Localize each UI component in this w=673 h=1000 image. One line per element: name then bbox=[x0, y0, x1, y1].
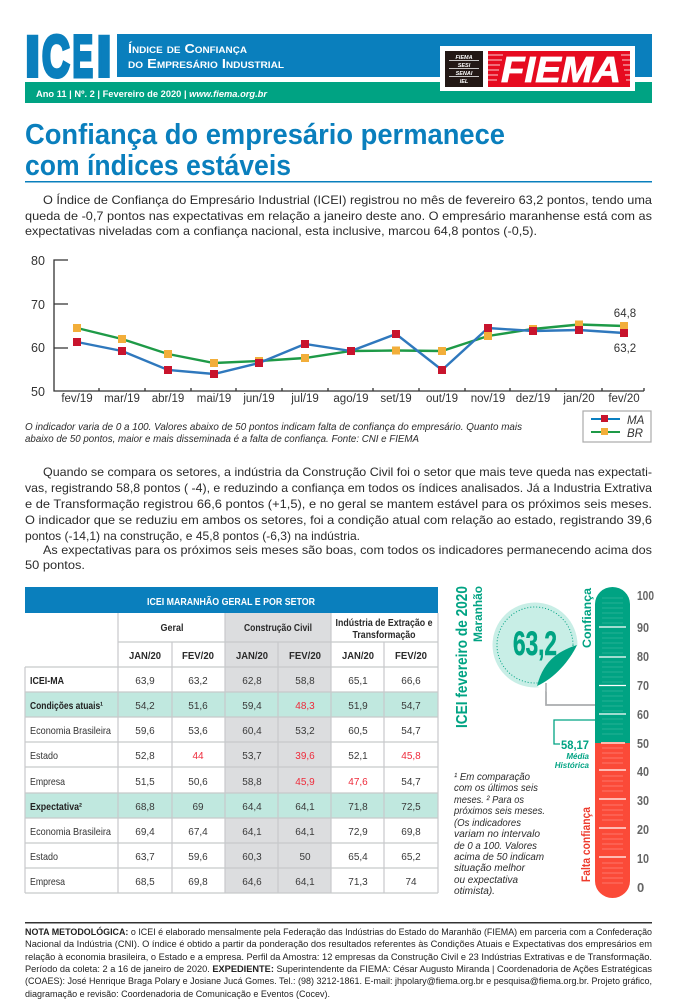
scale labels: 80 bbox=[637, 649, 649, 664]
month headers bbox=[129, 650, 427, 662]
month labels: jul/19 bbox=[290, 393, 319, 405]
row: Condições atuais: Condições atuais¹ bbox=[30, 700, 103, 712]
month labels: dez/19 bbox=[516, 393, 550, 405]
gauge footnote bbox=[453, 772, 545, 897]
row: Economia Brasileira: 60,4 bbox=[242, 726, 262, 737]
FIEMA logo: IEL bbox=[460, 79, 469, 85]
ICEI wordmark bbox=[24, 24, 112, 90]
row: Empresa: Empresa bbox=[30, 776, 65, 788]
ICEI wordmark: E bbox=[72, 24, 93, 90]
row: Empresa (expectativa): 64,6 bbox=[242, 877, 262, 888]
row: Empresa: 58,8 bbox=[242, 777, 262, 788]
ICEI wordmark: C bbox=[42, 24, 70, 90]
month labels: jan/20 bbox=[562, 393, 595, 405]
chart note bbox=[25, 421, 523, 445]
row: Economia Brasileira: 53,2 bbox=[295, 726, 315, 737]
gauge footnote: variam no intervalo bbox=[454, 829, 540, 840]
gauge footnote: ou expectativa bbox=[454, 875, 518, 886]
publication name: do Empresário Industrial bbox=[128, 56, 285, 71]
thermometer gauge bbox=[581, 587, 654, 898]
methodology footer: relação à economia brasileira, o Estado e a empresa. Perfil da Amostra: 12 empresas da Construção Civil e 23 Indústrias Extrativas e de Transformação. bbox=[25, 952, 652, 963]
vertical title: Maranhão bbox=[471, 586, 485, 642]
month headers: FEV/20 bbox=[182, 650, 214, 662]
sector analysis paragraphs: O indicador que se reduziu em ambos os setores, foi a condição atual com relação ao estado, registrando 39,6 bbox=[25, 513, 652, 527]
thermometer gauge: Falta confiança bbox=[581, 806, 593, 882]
row: Empresa (expectativa): 69,8 bbox=[188, 877, 208, 888]
row: Empresa (expectativa) bbox=[30, 876, 417, 888]
sector analysis paragraphs: vas, registrando 58,8 pontos ( -4), e reduzindo a confiança em todos os índices analisados. Já a Industria Extrativa bbox=[25, 481, 652, 495]
end value labels bbox=[614, 308, 636, 355]
minor ticks bbox=[602, 598, 623, 734]
row: Empresa (expectativa): 74 bbox=[405, 877, 417, 888]
scale labels: 100 bbox=[637, 588, 654, 603]
confidence section bbox=[595, 587, 630, 743]
scale labels: 0 bbox=[637, 880, 644, 895]
header banner bbox=[24, 24, 652, 103]
row: Expectativa: Expectativa² bbox=[30, 801, 82, 813]
month labels: nov/19 bbox=[471, 393, 505, 405]
group headers: Construção Civil bbox=[244, 622, 312, 634]
row: Estado: 44 bbox=[192, 751, 204, 762]
month labels: fev/20 bbox=[608, 393, 640, 405]
row: Expectativa: 71,8 bbox=[348, 802, 368, 813]
row: Estado (expectativa): Estado bbox=[30, 851, 58, 863]
series MA line bbox=[77, 328, 624, 374]
methodology footer bbox=[25, 922, 652, 1000]
intro paragraph: expectativas niveladas com a confiança nacional, esta inclusive, marcou 64,8 pontos (-0,5). bbox=[25, 224, 537, 238]
row: Expectativa: 72,5 bbox=[401, 802, 421, 813]
table: ICEI Maranhão bbox=[25, 587, 438, 893]
FIEMA logo: SENAI bbox=[456, 71, 473, 77]
row: Estado (expectativa): 60,3 bbox=[242, 852, 262, 863]
group headers bbox=[160, 617, 433, 641]
group headers: Geral bbox=[160, 622, 184, 634]
month headers: FEV/20 bbox=[289, 650, 321, 662]
row: Economia Brasileira: 54,7 bbox=[401, 726, 421, 737]
y axis labels: 80 bbox=[31, 254, 45, 268]
month labels bbox=[61, 393, 640, 405]
row: Economia Brasileira (expectativa): 72,9 bbox=[348, 827, 368, 838]
historical average marker: Histórica bbox=[555, 761, 590, 770]
vertical title bbox=[454, 586, 485, 728]
methodology footer: Nacional da Indústria (CNI). O índice é obtido a partir da ponderação dos resultados referentes às Condições Atuais e Expectativas dos empresários em bbox=[25, 939, 652, 950]
month headers: JAN/20 bbox=[236, 650, 268, 662]
historical average marker: 58,17 bbox=[561, 740, 589, 752]
row: Empresa: 47,6 bbox=[348, 777, 368, 788]
badge circle bbox=[492, 602, 578, 688]
row: Empresa bbox=[30, 776, 421, 788]
publication name bbox=[128, 41, 285, 71]
row: Empresa: 45,9 bbox=[295, 777, 315, 788]
sector analysis paragraphs: 50 pontos. bbox=[25, 558, 85, 572]
row: ICEI-MA: 66,6 bbox=[401, 676, 421, 687]
row: Empresa (expectativa): Empresa bbox=[30, 876, 65, 888]
row: Empresa: 50,6 bbox=[188, 777, 208, 788]
month labels: mar/19 bbox=[104, 393, 140, 405]
row: Estado: 52,8 bbox=[135, 751, 155, 762]
scale labels: 10 bbox=[637, 851, 649, 866]
row: Estado: 45,8 bbox=[401, 751, 421, 762]
row: Expectativa: 64,1 bbox=[295, 802, 315, 813]
row: Economia Brasileira (expectativa): 69,8 bbox=[401, 827, 421, 838]
month labels: mai/19 bbox=[197, 393, 231, 405]
FIEMA logo: FIEMA bbox=[455, 55, 473, 61]
row: Condições atuais: 54,7 bbox=[401, 701, 421, 712]
row: ICEI-MA: 58,8 bbox=[295, 676, 315, 687]
series MA markers bbox=[73, 324, 628, 378]
ICEI wordmark: I bbox=[96, 24, 112, 90]
FIEMA logo: SESI bbox=[458, 63, 471, 69]
table grid bbox=[25, 613, 438, 893]
month labels: set/19 bbox=[380, 393, 412, 405]
sector analysis paragraphs bbox=[25, 465, 652, 572]
row: Estado bbox=[30, 750, 421, 762]
main headline bbox=[25, 119, 505, 182]
end value labels: 63,2 bbox=[614, 343, 636, 355]
sector analysis paragraphs: As expectativas para os próximos seis meses são boas, com todos os indicadores permanecendo acima dos bbox=[43, 543, 652, 557]
row: Empresa (expectativa): 71,3 bbox=[348, 877, 368, 888]
chart note: abaixo de 50 pontos, maior e mais disseminada é a falta de confiança. Fonte: CNI e FIEMA bbox=[25, 433, 419, 445]
publication name: Índice de Confiança bbox=[128, 41, 248, 56]
row: Economia Brasileira (expectativa): Economia Brasileira bbox=[30, 826, 111, 838]
row: Expectativa bbox=[30, 801, 421, 813]
gauge footnote: (Os indicadores bbox=[454, 818, 521, 829]
y axis labels: 50 bbox=[31, 385, 45, 399]
sector analysis paragraphs: e de Transformação registrou 66,6 pontos (+1,5), e no geral se mantem estável para os próximos seis meses. bbox=[25, 497, 652, 511]
row: Economia Brasileira (expectativa): 64,1 bbox=[295, 827, 315, 838]
row: Empresa (expectativa): 68,5 bbox=[135, 877, 155, 888]
row: Empresa: 51,5 bbox=[135, 777, 155, 788]
row: Expectativa: 68,8 bbox=[135, 802, 155, 813]
gauge footnote: próximos seis meses. bbox=[453, 806, 545, 817]
table title bar bbox=[25, 587, 438, 613]
table: ICEI Maranhão: ICEI MARANHÃO GERAL E POR SETOR bbox=[147, 595, 315, 608]
row: Estado (expectativa): 59,6 bbox=[188, 852, 208, 863]
chart legend: MA bbox=[627, 415, 645, 427]
intro paragraph: O Índice de Confiança do Empresário Industrial (ICEI) registrou no mês de fevereiro 63,2 pontos, tendo uma bbox=[43, 192, 652, 207]
scale labels: 50 bbox=[637, 736, 649, 751]
row: Estado (expectativa): 65,4 bbox=[348, 852, 368, 863]
historical average marker: Média bbox=[566, 752, 590, 761]
row: Economia Brasileira (expectativa): 67,4 bbox=[188, 827, 208, 838]
row: Estado: 39,6 bbox=[295, 751, 315, 762]
major ticks bbox=[599, 627, 626, 857]
sector analysis paragraphs: pontos (-14,1) na construção, e 45,8 pontos (-6,3) na indústria. bbox=[25, 529, 360, 543]
row: Empresa: 54,7 bbox=[401, 777, 421, 788]
scale labels: 90 bbox=[637, 620, 649, 635]
main headline: Confiança do empresário permanece bbox=[25, 119, 505, 151]
page curl bbox=[537, 645, 577, 686]
historical average marker bbox=[554, 720, 595, 770]
scale labels bbox=[637, 588, 654, 895]
vertical title: ICEI fevereiro de 2020 bbox=[454, 586, 471, 728]
row: ICEI-MA: 63,9 bbox=[135, 676, 155, 687]
table backgrounds bbox=[225, 613, 331, 893]
row: Condições atuais bbox=[30, 700, 421, 712]
y axis labels: 60 bbox=[31, 341, 45, 355]
end value labels: 64,8 bbox=[614, 308, 636, 320]
row: Economia Brasileira: 60,5 bbox=[348, 726, 368, 737]
FIEMA logo bbox=[440, 46, 635, 91]
chart legend: BR bbox=[627, 428, 643, 440]
group headers: Indústria de Extração e bbox=[336, 617, 433, 629]
group headers: Transformação bbox=[352, 629, 416, 641]
intro paragraph bbox=[25, 192, 652, 238]
month headers: FEV/20 bbox=[395, 650, 427, 662]
month labels: ago/19 bbox=[333, 393, 369, 405]
scale labels: 60 bbox=[637, 707, 649, 722]
y axis labels bbox=[31, 254, 45, 399]
badge connector bbox=[546, 683, 598, 705]
blue title bar bbox=[117, 34, 652, 77]
series BR line bbox=[77, 324, 624, 363]
row: Estado: 53,7 bbox=[242, 751, 262, 762]
gauge footnote: acima de 50 indicam bbox=[454, 852, 544, 863]
gauge side labels: Confiança bbox=[582, 587, 594, 648]
gauge footnote: com os últimos seis bbox=[454, 783, 538, 794]
methodology footer: Período da coleta: 2 a 16 de janeiro de 2020. EXPEDIENTE: Superintendente da FIEMA: César Augusto Miranda | Coordenadoria de Ações Estratégicas bbox=[25, 964, 652, 975]
row: Economia Brasileira (expectativa): 64,1 bbox=[242, 827, 262, 838]
row: Estado (expectativa): 50 bbox=[299, 852, 311, 863]
line chart bbox=[31, 254, 644, 405]
gauge footnote: situação melhor bbox=[454, 863, 526, 874]
gauge footnote: de 0 a 100. Valores bbox=[454, 841, 537, 852]
month labels: fev/19 bbox=[61, 393, 93, 405]
row: Economia Brasileira bbox=[30, 725, 421, 737]
row: Condições atuais: 51,9 bbox=[348, 701, 368, 712]
edition text: Ano 11 | Nº. 2 | Fevereiro de 2020 | www.fiema.org.br bbox=[36, 89, 268, 100]
FIEMA logo: FIEMA bbox=[501, 49, 621, 90]
row: Empresa (expectativa): 64,1 bbox=[295, 877, 315, 888]
scale labels: 30 bbox=[637, 793, 649, 808]
row: Economia Brasileira: 59,6 bbox=[135, 726, 155, 737]
month labels: out/19 bbox=[426, 393, 458, 405]
sector analysis paragraphs: Quando se compara os setores, a indústria da Construção Civil foi o setor que mais teve queda nas expectati- bbox=[43, 465, 652, 479]
intro paragraph: queda de -0,7 pontos nas expectativas em relação a janeiro deste ano. O empresário maranhense está com as bbox=[25, 209, 652, 223]
gauge footnote: meses. ² Para os bbox=[454, 795, 524, 806]
month labels: jun/19 bbox=[242, 393, 275, 405]
row: Economia Brasileira: Economia Brasileira bbox=[30, 725, 111, 737]
row: Economia Brasileira (expectativa) bbox=[30, 826, 421, 838]
month labels: abr/19 bbox=[152, 393, 184, 405]
axes bbox=[54, 260, 644, 391]
row: Estado (expectativa): 65,2 bbox=[401, 852, 421, 863]
chart note: O indicador varia de 0 a 100. Valores abaixo de 50 pontos indicam falta de confiança do empresário. Quanto mais bbox=[25, 421, 523, 433]
gauge footnote: ¹ Em comparação bbox=[454, 772, 530, 783]
no-confidence section bbox=[595, 743, 630, 898]
row: Estado: 52,1 bbox=[348, 751, 368, 762]
row: Condições atuais: 48,3 bbox=[295, 701, 315, 712]
row: ICEI-MA bbox=[30, 675, 421, 687]
row: Estado (expectativa): 63,7 bbox=[135, 852, 155, 863]
ICEI wordmark: I bbox=[24, 24, 41, 90]
row: Estado: Estado bbox=[30, 750, 58, 762]
month headers: JAN/20 bbox=[342, 650, 374, 662]
row: Condições atuais: 59,4 bbox=[242, 701, 262, 712]
gauge value badge bbox=[492, 602, 598, 705]
methodology footer: diagramação e revisão: Coordenadoria de Comunicação e Eventos (Cocev). bbox=[25, 989, 330, 1000]
row: ICEI-MA: 63,2 bbox=[188, 676, 208, 687]
row: ICEI-MA: 62,8 bbox=[242, 676, 262, 687]
scale labels: 70 bbox=[637, 678, 649, 693]
row: Condições atuais: 51,6 bbox=[188, 701, 208, 712]
row: ICEI-MA: 65,1 bbox=[348, 676, 368, 687]
row: Expectativa: 64,4 bbox=[242, 802, 262, 813]
gauge footnote: otimista). bbox=[454, 886, 495, 897]
row: Expectativa: 69 bbox=[192, 802, 204, 813]
row: Condições atuais: 54,2 bbox=[135, 701, 155, 712]
green edition strip bbox=[25, 82, 652, 103]
badge peeled corner cut-out bbox=[537, 645, 590, 700]
row: Economia Brasileira (expectativa): 69,4 bbox=[135, 827, 155, 838]
row: Estado (expectativa) bbox=[30, 851, 421, 863]
methodology footer: NOTA METODOLÓGICA: o ICEI é elaborado mensalmente pela Federação das Indústrias do Estado do Maranhão (FIEMA) em parceria com a Confederação bbox=[25, 926, 652, 938]
row: Economia Brasileira: 53,6 bbox=[188, 726, 208, 737]
row: ICEI-MA: ICEI-MA bbox=[30, 675, 64, 687]
gauge connector redraw bbox=[546, 683, 598, 705]
badge value: 63,2 bbox=[513, 625, 557, 663]
scale labels: 20 bbox=[637, 822, 649, 837]
month headers: JAN/20 bbox=[129, 650, 161, 662]
chart legend bbox=[583, 411, 651, 442]
series BR markers bbox=[73, 320, 628, 367]
scale labels: 40 bbox=[637, 764, 649, 779]
y axis labels: 70 bbox=[31, 298, 45, 312]
main headline: com índices estáveis bbox=[25, 150, 291, 182]
